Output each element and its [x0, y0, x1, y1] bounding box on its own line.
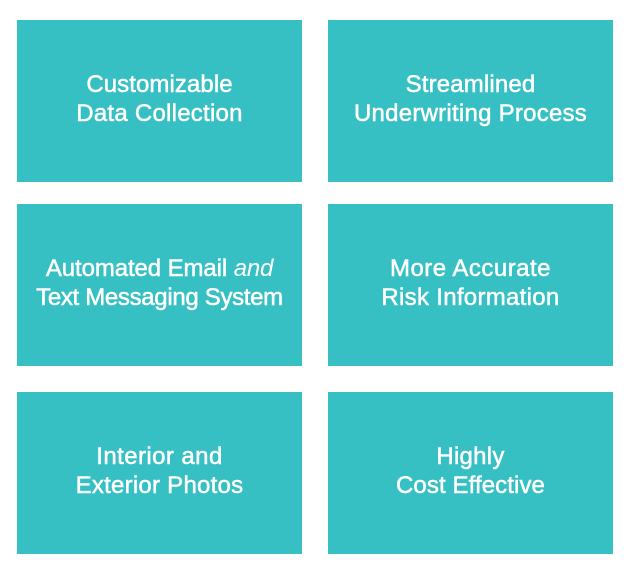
panel: Streamlined Underwriting Process: Streamlined — [406, 71, 535, 98]
panel: Interior and Exterior Photos: Exterior Photos — [76, 472, 243, 499]
panel: Highly Cost Effective: Cost Effective — [396, 472, 545, 499]
panel: Automated Email and Text Messaging System: Automated Email and — [46, 255, 273, 282]
panel: Automated Email and Text Messaging System — [17, 204, 302, 366]
panel: Interior and Exterior Photos: Interior and — [96, 443, 223, 470]
panel: Highly Cost Effective — [328, 392, 613, 554]
panel: More Accurate Risk Information: More Accurate — [390, 255, 551, 282]
panel: More Accurate Risk Information — [328, 204, 613, 366]
panel: Automated Email and Text Messaging System: Text Messaging System — [36, 284, 283, 311]
panel: Customizable Data Collection — [17, 20, 302, 182]
panel: Streamlined Underwriting Process: Underwriting Process — [354, 100, 587, 127]
panel: Streamlined Underwriting Process — [328, 20, 613, 182]
panel: Customizable Data Collection: Data Collection — [76, 100, 243, 127]
panel: More Accurate Risk Information: Risk Information — [381, 284, 560, 311]
panel: Interior and Exterior Photos — [17, 392, 302, 554]
panel: Highly Cost Effective: Highly — [436, 443, 505, 470]
panel: Customizable Data Collection: Customizable — [86, 71, 233, 98]
